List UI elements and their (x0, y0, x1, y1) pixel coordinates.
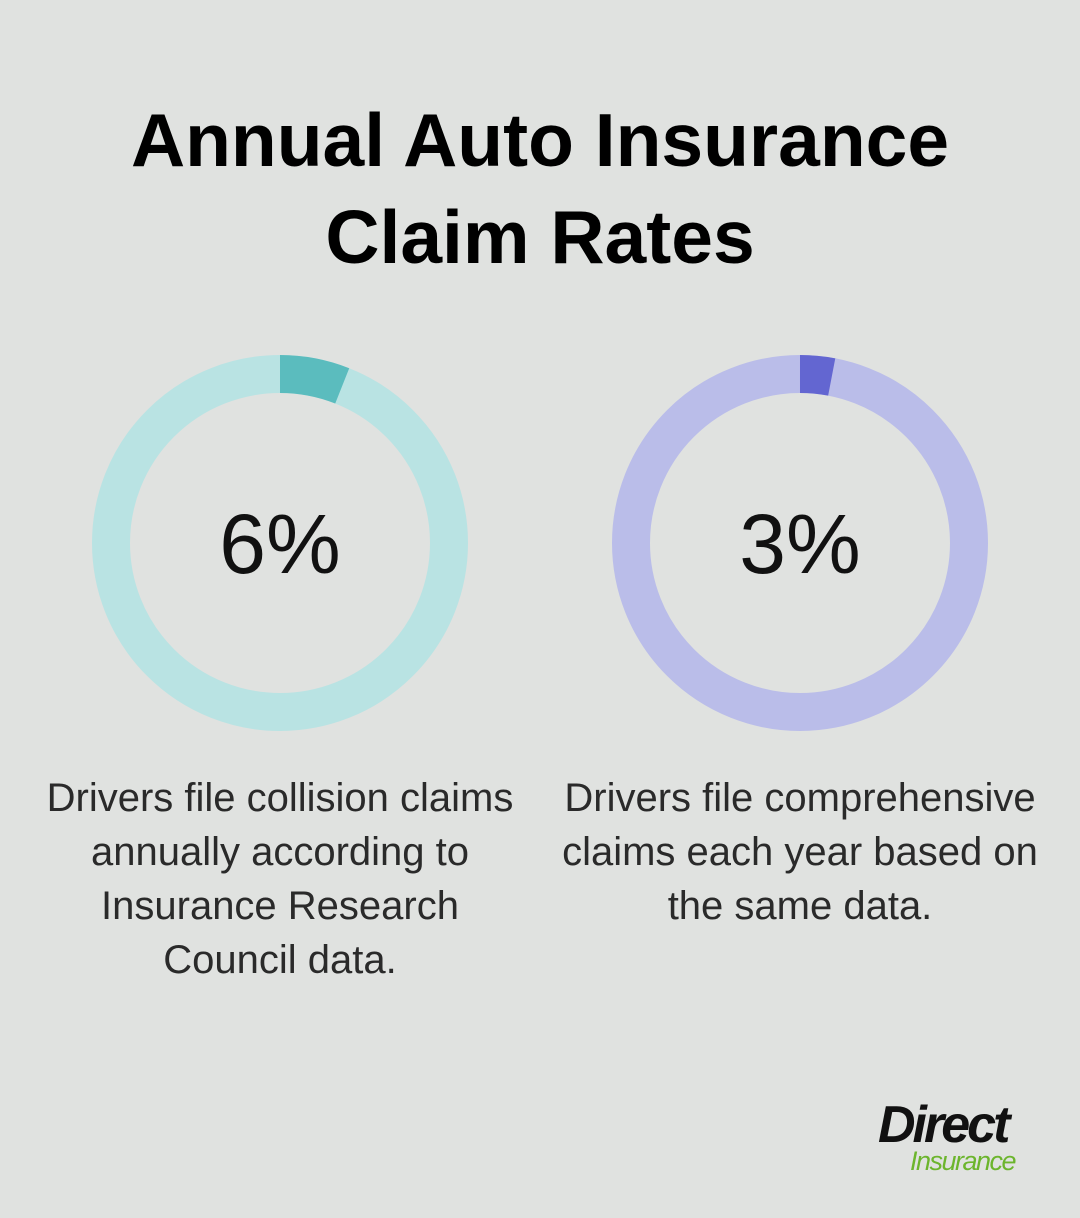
donut right (631, 374, 969, 712)
donut left (111, 374, 449, 712)
logo: Insurance (910, 1146, 1015, 1176)
stat 3%: 3% (739, 497, 861, 591)
description right: Drivers file comprehensive claims each year based on the same data. (562, 776, 1038, 928)
stat 6%: 6% (219, 497, 341, 591)
logo: Direct (878, 1096, 1007, 1154)
logo (878, 1096, 1016, 1176)
title: Claim Rates (325, 195, 755, 279)
title (131, 98, 949, 279)
title: Annual Auto Insurance (131, 98, 949, 182)
description left: Drivers file collision claims annually according to Insurance Research Council data. (47, 776, 513, 982)
